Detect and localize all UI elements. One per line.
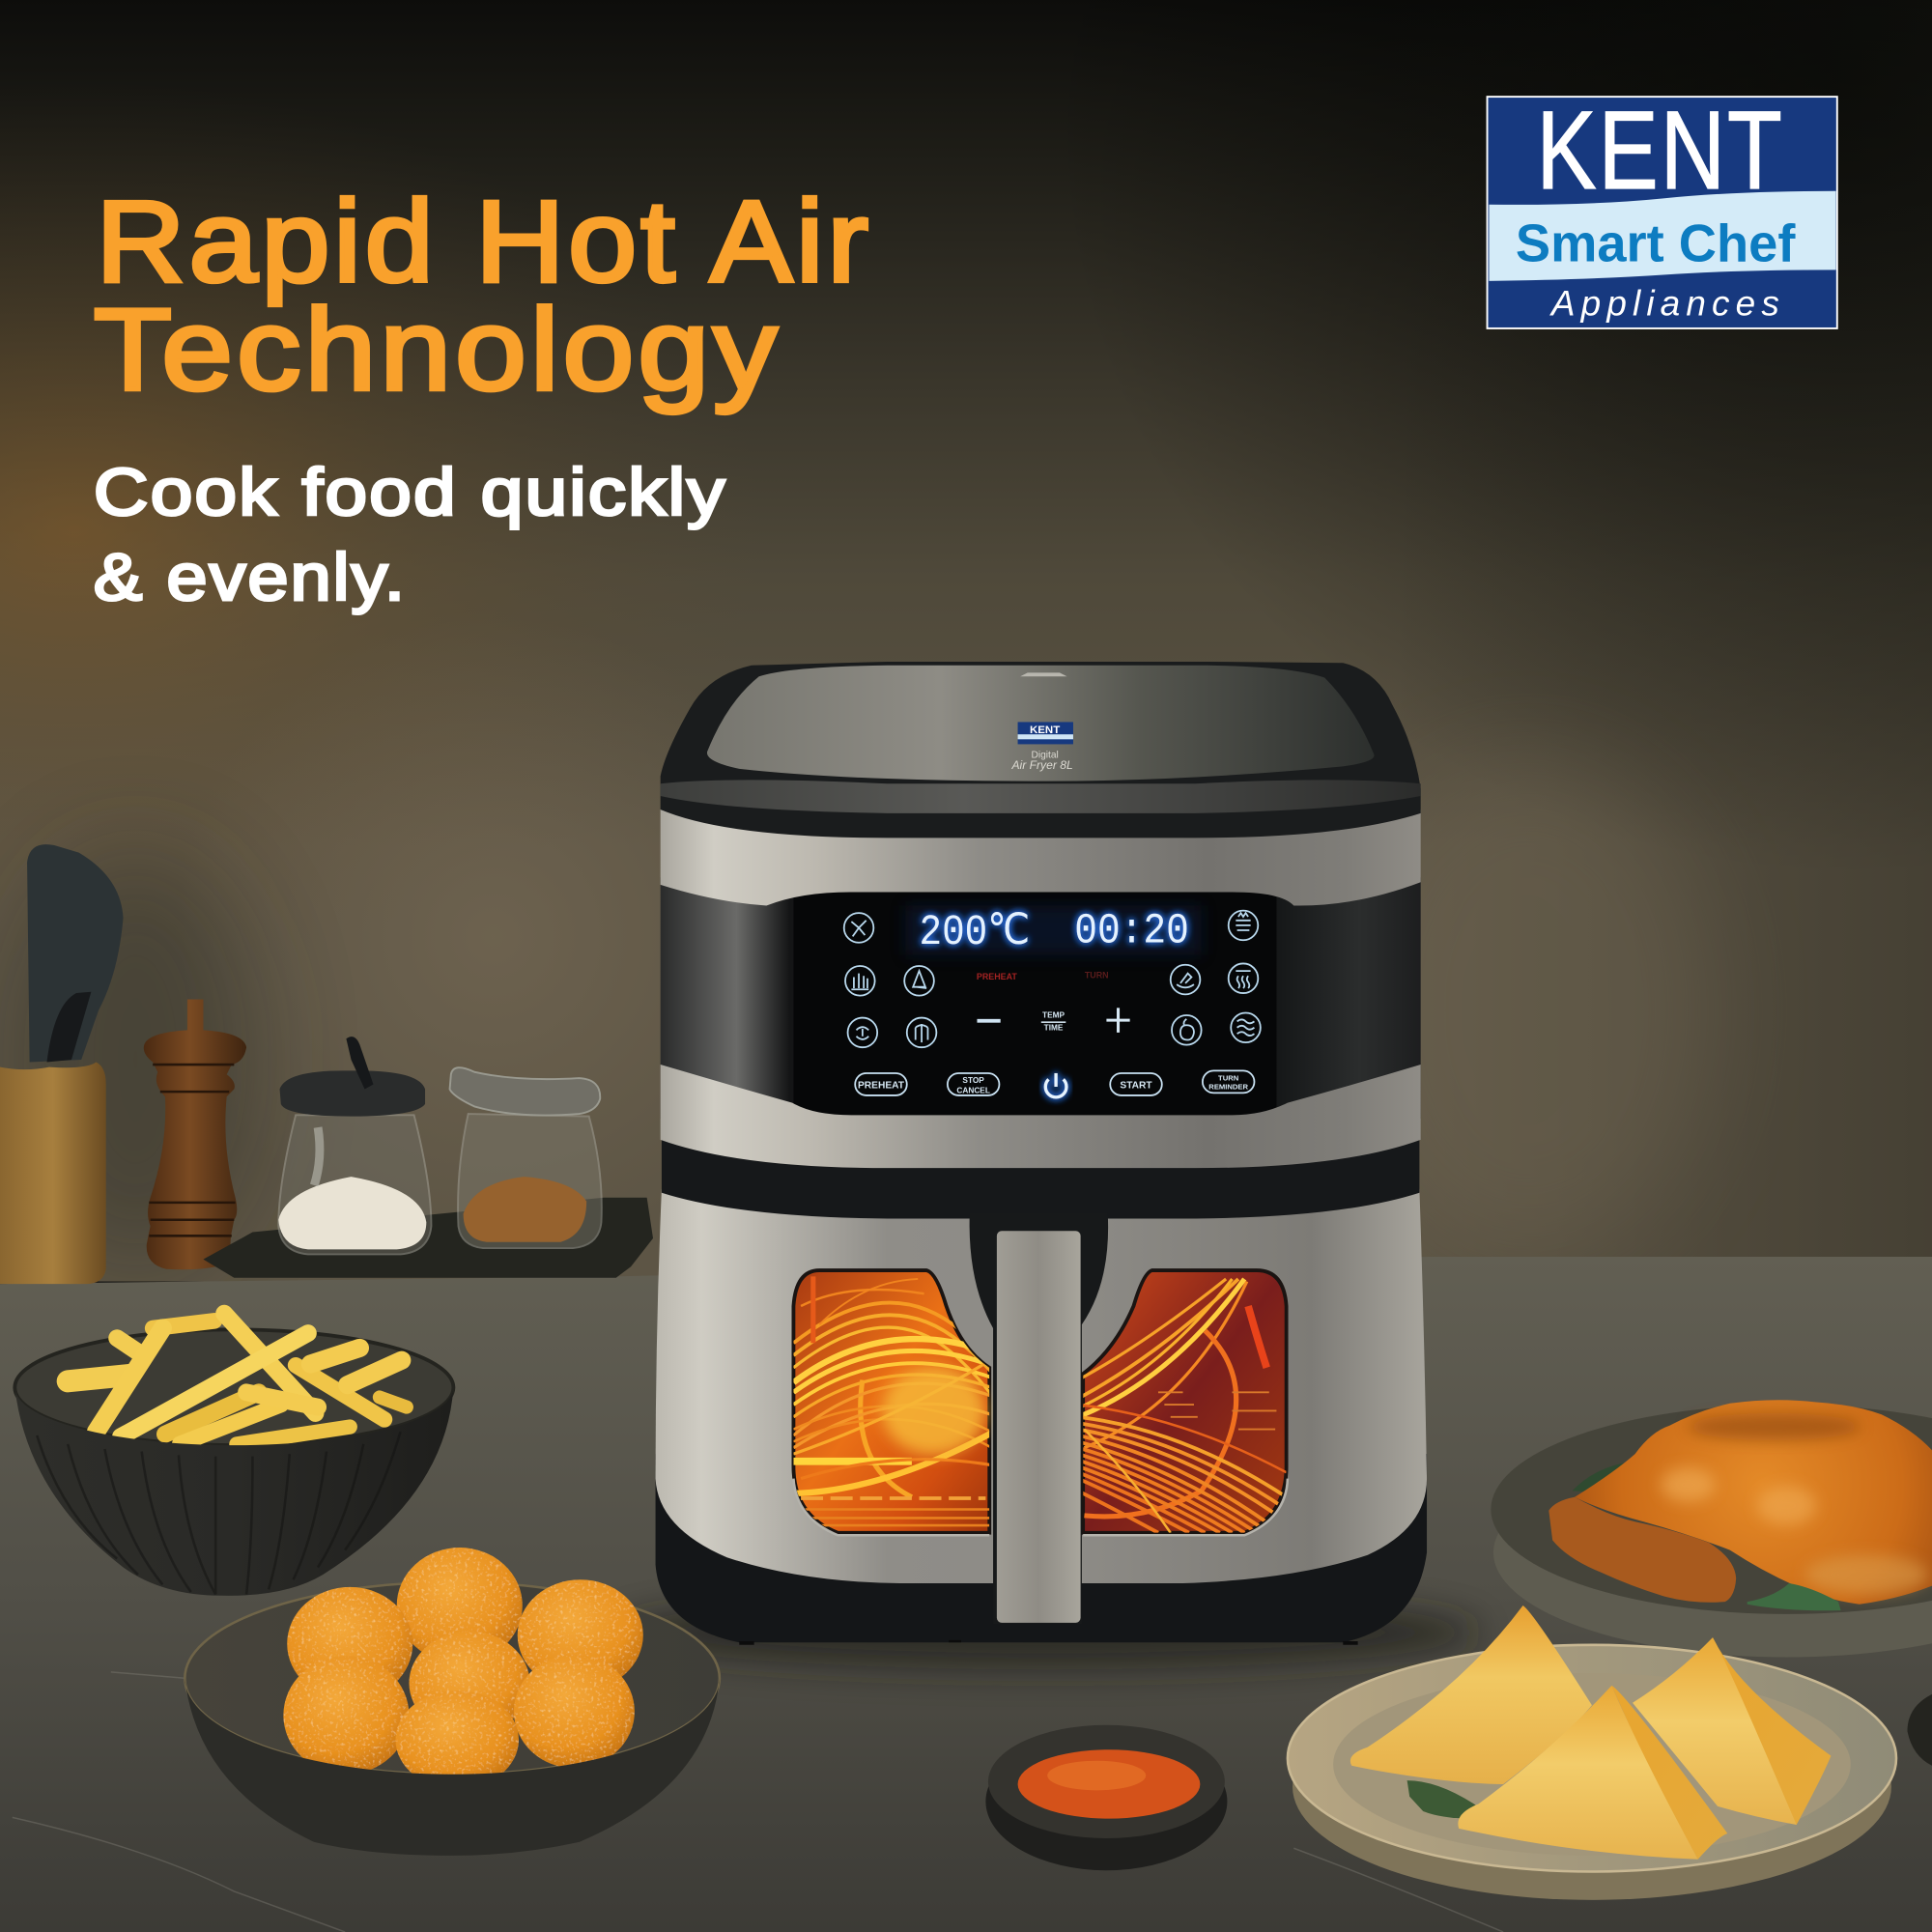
temp/time label: TEMP: [1042, 1010, 1065, 1020]
spice jar: [450, 1067, 602, 1248]
stop/cancel button: STOP: [962, 1075, 984, 1085]
plus button: [1106, 1008, 1130, 1033]
roast chicken: [1575, 1400, 1932, 1605]
sauce dish: [985, 1725, 1227, 1870]
plate of samosas: [1288, 1605, 1896, 1900]
background: kitchen wall: [0, 0, 1932, 1282]
touch icons: [844, 911, 1261, 1047]
fries: [68, 1314, 407, 1444]
preheat button: PREHEAT: [858, 1080, 905, 1091]
upper steel band: [661, 810, 1421, 906]
background: stone counter: [0, 1257, 1932, 1932]
tray with jars: [203, 1037, 653, 1278]
garnish: [1407, 1780, 1485, 1819]
lid text: [1010, 750, 1073, 772]
title: Technology: [94, 285, 781, 414]
control panel: [793, 890, 1276, 1119]
base: [656, 1454, 1427, 1642]
lid text: Digital: [1031, 750, 1059, 760]
lid rim highlight: [661, 780, 1421, 813]
lower steel band: [661, 1065, 1421, 1168]
handle holder: [970, 1212, 1108, 1624]
feet: [739, 1640, 1358, 1645]
plate: [1493, 1448, 1932, 1658]
title: Rapid Hot Air: [96, 177, 872, 306]
plate front: [185, 1678, 720, 1856]
lid logo: KENT: [1030, 724, 1060, 736]
small bowl at right edge: [1907, 1694, 1932, 1766]
herb behind chicken: [1573, 1462, 1634, 1493]
title: [94, 177, 872, 414]
temp/time label: TIME: [1044, 1022, 1064, 1032]
dark plate interior: [185, 1582, 720, 1775]
handle: [997, 1231, 1081, 1623]
minus button: [977, 1019, 1001, 1023]
dark tray: [203, 1198, 653, 1278]
stop/cancel button: [948, 1073, 999, 1095]
basket body: [656, 1189, 1427, 1583]
bowl of fries: [14, 1314, 453, 1596]
utensil holder: [0, 844, 124, 1284]
wooden cup: [0, 1062, 106, 1284]
turn reminder button: [1203, 1070, 1254, 1093]
LED glow backing: [906, 906, 1202, 955]
right window: hot air streams: [1078, 1270, 1287, 1533]
subtitle: & evenly.: [94, 540, 407, 614]
dark control section: [661, 877, 1421, 1119]
left window: hot air swirl: [793, 1270, 1010, 1533]
subtitle: [94, 455, 727, 614]
bowl interior: [14, 1329, 453, 1445]
samosas: [1350, 1605, 1831, 1860]
separator band: [662, 1133, 1419, 1218]
chicken leg: [1548, 1497, 1736, 1603]
air fryer: [656, 662, 1427, 1645]
red sauce: [1018, 1749, 1200, 1819]
wave band: [1489, 191, 1836, 281]
LED temperature display: 200℃: [920, 909, 1030, 957]
subtitle: Cook food quickly: [94, 455, 727, 529]
preheat indicator: PREHEAT: [977, 972, 1017, 981]
garnish: [1747, 1583, 1841, 1610]
plate of golden balls: [185, 1548, 720, 1856]
pepper mill: [144, 999, 246, 1269]
lid logo: [1018, 722, 1073, 744]
shadow under fryer: [616, 1596, 1479, 1669]
preheat button: [855, 1073, 907, 1095]
temp/time label: [1041, 1010, 1065, 1032]
Appliances wordmark: Appliances: [1549, 284, 1779, 324]
icon: power: [1045, 1073, 1066, 1097]
lid text: Air Fryer 8L: [1010, 758, 1073, 772]
turn reminder button: TURN: [1218, 1074, 1238, 1083]
lid vent mark: [1020, 672, 1067, 676]
start button: START: [1120, 1080, 1152, 1091]
stop/cancel button: CANCEL: [956, 1085, 990, 1094]
turn indicator: TURN: [1085, 971, 1109, 980]
icon: spatula utensils: [27, 844, 124, 1062]
lid top surface: [707, 666, 1375, 781]
Smart Chef wordmark: Smart Chef: [1516, 213, 1796, 272]
plate of roast chicken: [1491, 1400, 1932, 1658]
LED time display: 00:20: [1074, 908, 1189, 956]
window glass edge highlight: [793, 1479, 1288, 1535]
plate body: [1293, 1673, 1891, 1900]
lid black trim: [661, 662, 1421, 838]
turn reminder button: REMINDER: [1208, 1083, 1249, 1092]
KENT wordmark: KENT: [1537, 89, 1784, 213]
KENT Smart Chef logo: [1488, 89, 1837, 328]
ribbed dark bowl body: [14, 1387, 453, 1596]
start button: [1110, 1073, 1162, 1095]
fried balls: [283, 1548, 643, 1789]
salt jar: [278, 1037, 431, 1254]
